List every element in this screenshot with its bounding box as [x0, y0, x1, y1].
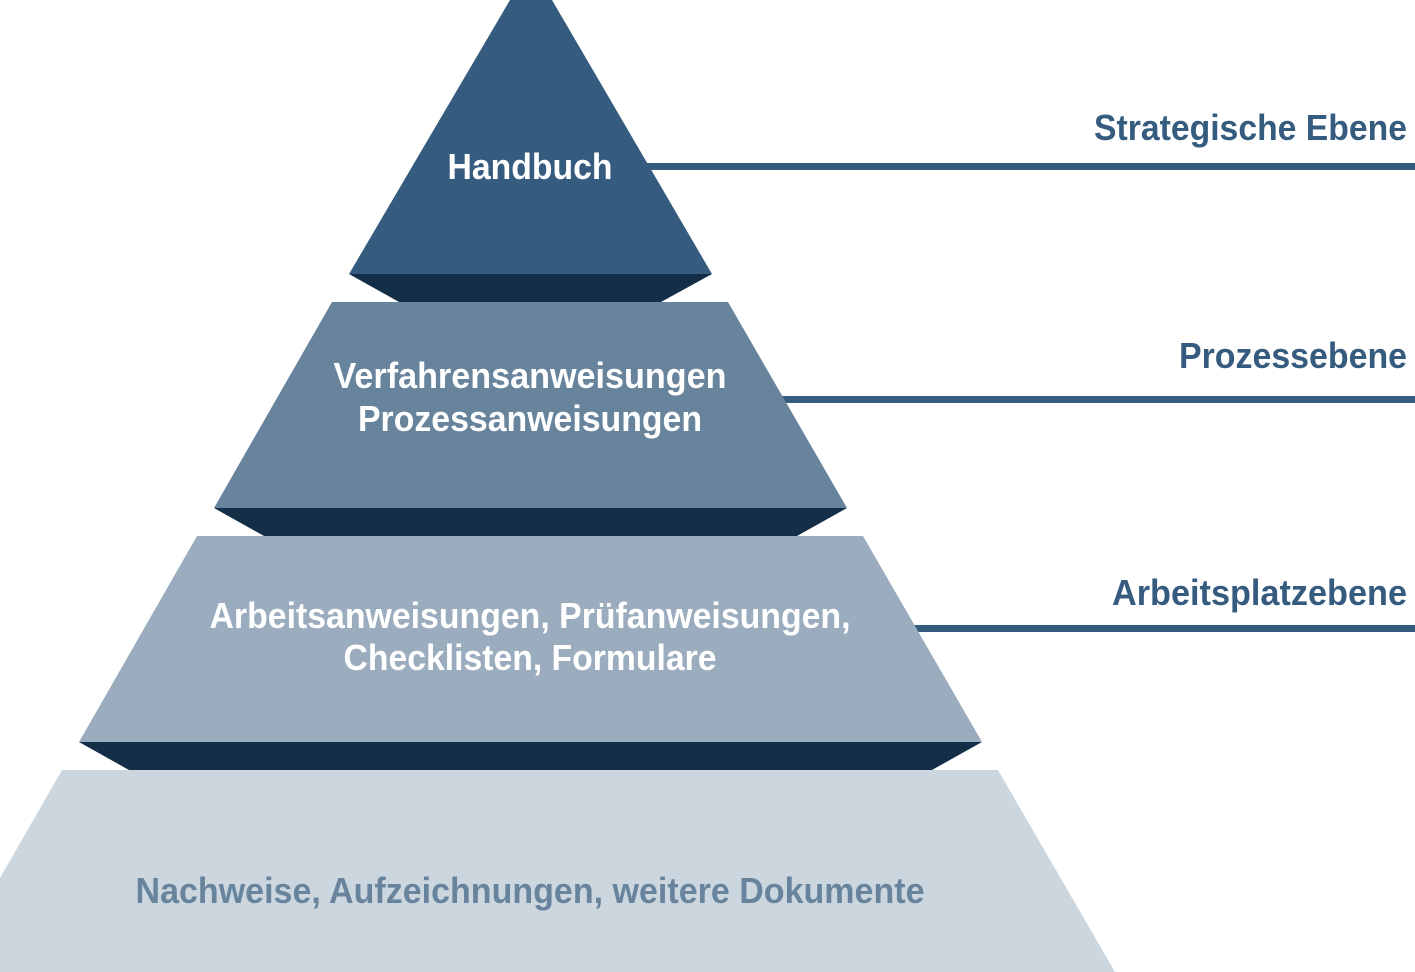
connector lines [645, 163, 1415, 632]
tier 4: Nachweise: Nachweise, Aufzeichnungen, weitere Dokumente [136, 870, 924, 911]
tier 3: Arbeitsanweisungen: Arbeitsanweisungen, Prüfanweisungen, [210, 595, 850, 636]
tier 2: Verfahrensanweisungen: Prozessanweisungen [358, 398, 702, 439]
tier 4: Nachweise [0, 770, 1115, 972]
tier 2: Verfahrensanweisungen: Verfahrensanweisungen [334, 355, 726, 396]
tier 1: Handbuch: Handbuch [448, 146, 612, 187]
tier 1: Handbuch [349, 0, 712, 302]
tier 2: Verfahrensanweisungen [214, 302, 847, 536]
tier 3: Arbeitsanweisungen: Checklisten, Formulare [344, 637, 716, 678]
tier 3: Arbeitsanweisungen [79, 536, 982, 770]
